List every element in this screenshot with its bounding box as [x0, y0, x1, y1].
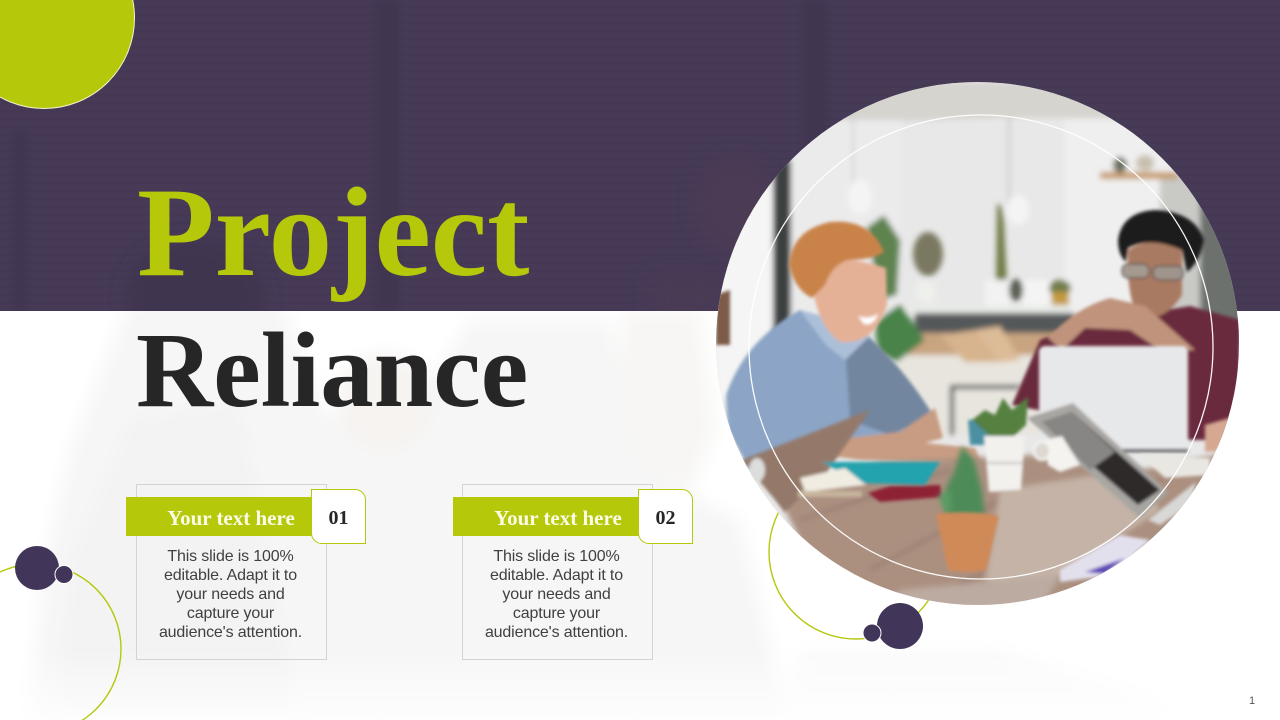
shelf [905, 305, 1070, 313]
left laptop lid [742, 410, 870, 512]
person: red-haired man in blue shirt [716, 222, 985, 470]
card 01 number [311, 489, 366, 544]
card 02 heading: Your text here [494, 506, 622, 530]
decorative lime ring behind photo [769, 465, 943, 639]
card 02 text: your needs and [502, 586, 611, 603]
card 01 text: capture your [187, 605, 274, 622]
dark circle pair at photo bottom [863, 603, 923, 649]
card 01 text: your needs and [176, 586, 285, 603]
teal pot [968, 418, 995, 445]
card 01 text: audience's attention. [159, 624, 302, 641]
card 02 number [638, 489, 693, 544]
decorative lime ring at left [0, 564, 121, 720]
card 02 text [485, 548, 628, 641]
card 01 heading [126, 497, 312, 536]
card 02 text: audience's attention. [485, 624, 628, 641]
right laptop with reflection [1027, 403, 1168, 518]
background: purple band with blinds [0, 0, 1280, 311]
card 02 text: editable. Adapt it to [490, 567, 623, 584]
card 01 number: 01 [328, 507, 348, 529]
card 02 frame [462, 484, 653, 660]
card 02 text: capture your [513, 605, 600, 622]
title: Project: Project [137, 163, 529, 303]
purple paper [1060, 535, 1150, 582]
card 01 frame [136, 484, 327, 660]
coffee cup [1045, 436, 1080, 472]
dark circle pair at left [15, 546, 73, 590]
shelf plants [866, 215, 900, 300]
title: Reliance: Reliance [136, 312, 528, 430]
card 02 number: 02 [656, 507, 676, 529]
books [822, 462, 940, 485]
person: man in maroon shirt [1012, 210, 1240, 440]
arm [836, 407, 981, 462]
open laptop back [1039, 346, 1188, 451]
card 01 [126, 484, 366, 660]
card 01 text [159, 548, 302, 641]
terracotta pot [936, 512, 999, 572]
card 02 [453, 484, 693, 660]
card 02 text: This slide is 100% [493, 548, 620, 565]
hand right [1202, 416, 1228, 454]
cactus [945, 446, 985, 517]
slide number: 1 [1249, 695, 1255, 707]
white pot and plant [984, 436, 1025, 492]
phone [868, 485, 942, 502]
card 02 heading [453, 497, 639, 536]
lime quarter circle top left [0, 0, 134, 108]
white ring on photo [749, 115, 1213, 579]
card 01 text: This slide is 100% [167, 548, 294, 565]
table [780, 450, 1240, 610]
circular team meeting photo [716, 82, 1245, 610]
card 01 heading: Your text here [167, 506, 295, 530]
card 01 text: editable. Adapt it to [164, 567, 297, 584]
background: faded meeting photo lower section [46, 312, 760, 678]
wall [716, 82, 1240, 606]
